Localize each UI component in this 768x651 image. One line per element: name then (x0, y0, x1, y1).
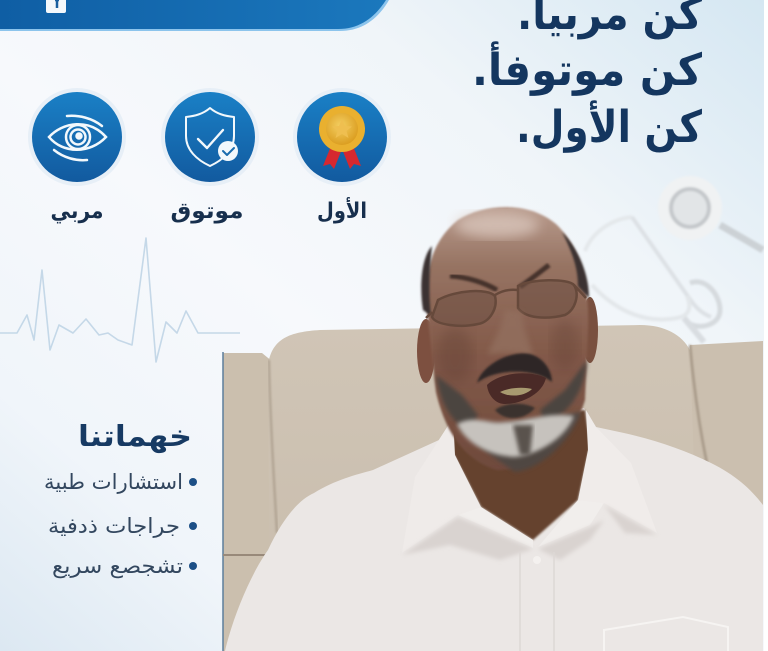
title (472, 0, 702, 153)
badge: educator (28, 88, 126, 224)
neck (453, 410, 590, 540)
icon: shield with check (186, 108, 238, 166)
sofa (223, 325, 763, 651)
hair (421, 232, 589, 316)
forehead highlight (455, 212, 539, 238)
title: كن الأول. (516, 100, 702, 153)
icon: medal (319, 106, 365, 169)
badge: trusted (161, 88, 259, 224)
shirt placket (520, 552, 554, 651)
ear right (582, 297, 598, 363)
shirt pocket (604, 617, 728, 651)
title: كن موتوفأ. (472, 41, 702, 96)
heartbeat line (0, 238, 240, 362)
services (44, 419, 197, 578)
shirt button (533, 556, 541, 564)
icon: social media square (46, 0, 66, 13)
label: مربي (50, 199, 104, 224)
side beard (436, 360, 587, 432)
label: الأول (317, 196, 367, 224)
shirt (225, 408, 763, 651)
beard (457, 412, 582, 472)
cheek shadows (437, 327, 473, 383)
mouth (487, 373, 546, 404)
glasses (426, 280, 586, 326)
service item: consultations: استشارات طبية (44, 470, 183, 494)
head (417, 207, 598, 472)
brows (450, 276, 497, 290)
icon: eye (49, 116, 106, 160)
service item: diagnosis: تشجصع سريع (52, 554, 183, 578)
label: موتوق (170, 199, 244, 224)
ear left (417, 319, 435, 383)
right edge strip (764, 0, 768, 651)
photo: man on sofa (223, 207, 763, 651)
service item: surgeries: جراجات ذدفية (48, 514, 180, 538)
moustache (477, 353, 552, 383)
collar shadows (402, 505, 657, 560)
collars (402, 418, 481, 553)
services heading: خهماتنا (78, 419, 192, 453)
icon: stethoscope (585, 176, 763, 342)
badge: first (293, 88, 391, 224)
header banner (0, 0, 389, 31)
nose (488, 310, 533, 358)
